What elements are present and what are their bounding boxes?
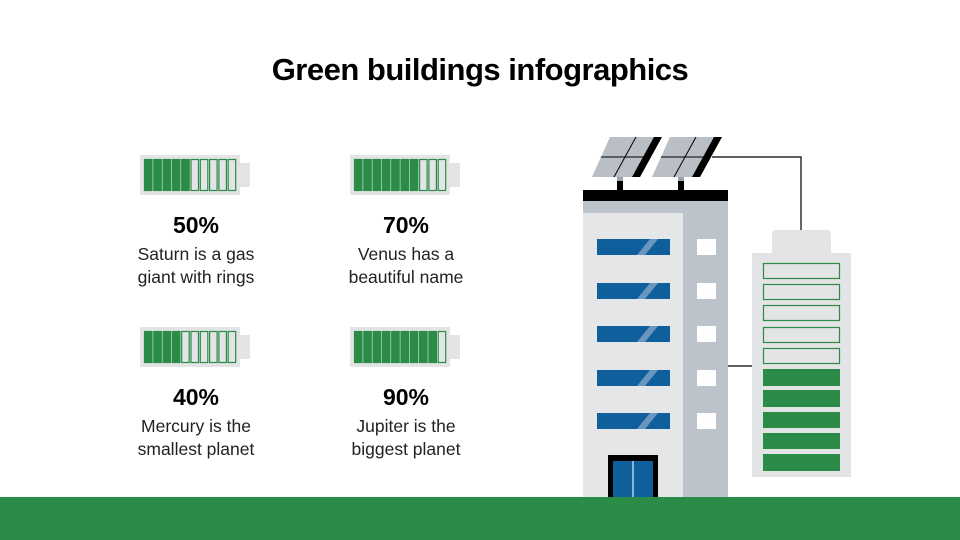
wires xyxy=(712,157,801,366)
battery icon 50% xyxy=(140,155,250,195)
battery icon 70% xyxy=(350,155,460,195)
battery icon 90% xyxy=(350,327,460,367)
title: Green buildings infographics xyxy=(272,52,688,87)
ground xyxy=(0,497,960,540)
item: 90% xyxy=(350,327,460,459)
item: 70% xyxy=(349,155,463,287)
item: 40%: 40% xyxy=(173,384,219,410)
building xyxy=(583,190,728,497)
item: 40%: Mercury is the xyxy=(141,416,251,436)
item: 90%: biggest planet xyxy=(352,439,460,459)
item: 70%: beautiful name xyxy=(349,267,463,287)
item: 40%: smallest planet xyxy=(138,439,254,459)
item: 40% xyxy=(138,327,254,459)
item: 50% xyxy=(138,155,254,287)
big battery xyxy=(752,230,851,477)
item: 90%: Jupiter is the xyxy=(356,416,456,436)
item: 50%: giant with rings xyxy=(138,267,254,287)
item: 70%: 70% xyxy=(383,212,429,238)
item: 50%: 50% xyxy=(173,212,219,238)
item: 50%: Saturn is a gas xyxy=(138,244,254,264)
item: 70%: Venus has a xyxy=(358,244,454,264)
solar panels xyxy=(592,137,722,190)
battery icon 40% xyxy=(140,327,250,367)
item: 90%: 90% xyxy=(383,384,429,410)
